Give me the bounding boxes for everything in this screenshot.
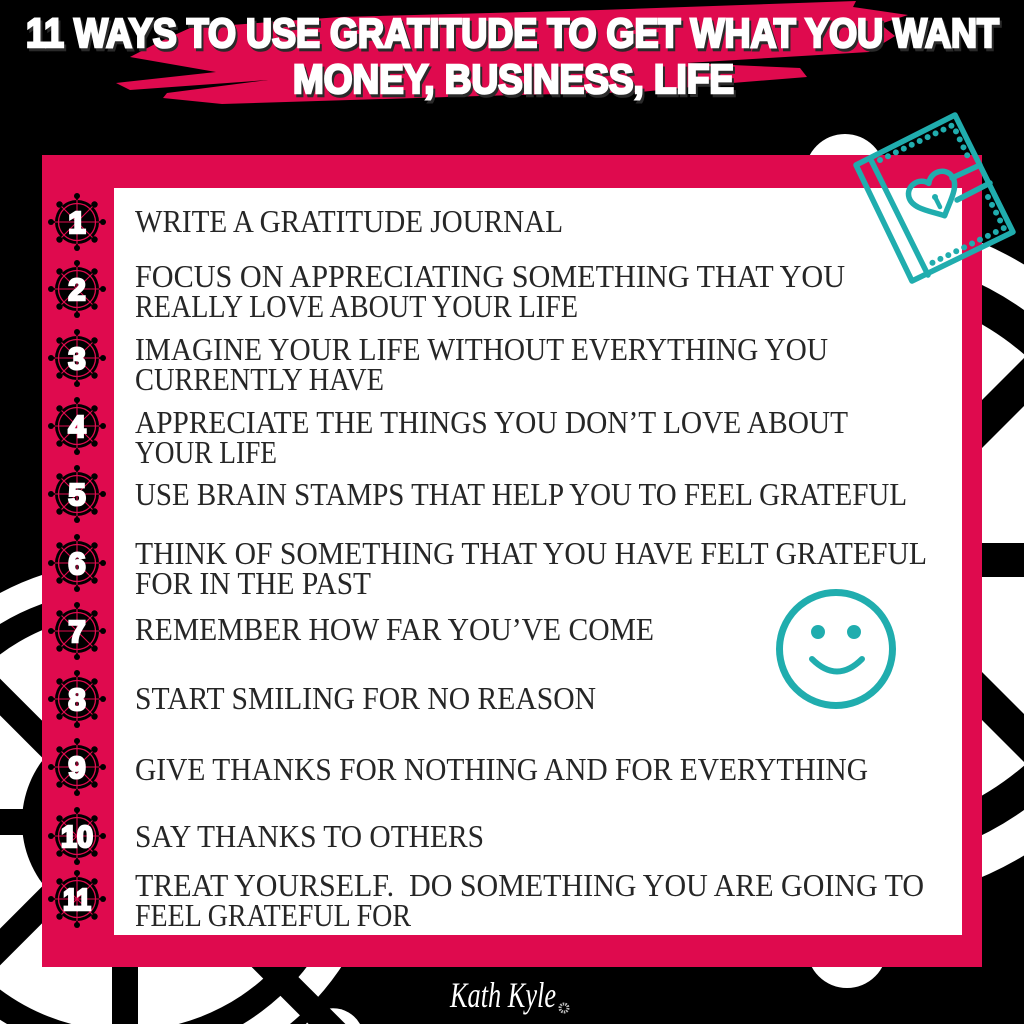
- item 3: CURRENTLY HAVE: [135, 361, 384, 397]
- item 9: 9: [68, 750, 86, 785]
- brush stroke behind title: [116, 1, 908, 104]
- item 10: [48, 807, 484, 865]
- item 2: REALLY LOVE ABOUT YOUR LIFE: [135, 288, 578, 324]
- item 4: APPRECIATE THE THINGS YOU DON’T LOVE ABOUT: [135, 404, 848, 440]
- background mandala: right: [805, 134, 1024, 988]
- item 3: [48, 329, 828, 397]
- panel: white list area: [114, 188, 962, 935]
- item 7: 7: [68, 614, 86, 649]
- item 1: 1: [68, 205, 86, 240]
- item 2: FOCUS ON APPRECIATING SOMETHING THAT YOU: [135, 258, 845, 294]
- item 11: TREAT YOURSELF. DO SOMETHING YOU ARE GOING TO: [135, 867, 924, 903]
- title: MONEY, BUSINESS, LIFE: [293, 56, 734, 102]
- item 4: YOUR LIFE: [135, 434, 277, 470]
- item 8: 8: [68, 682, 86, 717]
- item 6: [48, 534, 927, 601]
- item 11: FEEL GRATEFUL FOR: [135, 897, 412, 933]
- item 8: [48, 670, 596, 728]
- item 4: 4: [68, 409, 86, 444]
- item 10: 10: [61, 819, 93, 854]
- background mandala: left: [0, 562, 385, 1024]
- signature: Kath Kyle: [449, 975, 556, 1015]
- panel: red frame: [42, 155, 982, 967]
- item 8: START SMILING FOR NO REASON: [135, 680, 596, 716]
- item 5: USE BRAIN STAMPS THAT HELP YOU TO FEEL GRATEFUL: [135, 476, 907, 512]
- item 1: [48, 193, 563, 251]
- title: [26, 10, 999, 102]
- item 6: THINK OF SOMETHING THAT YOU HAVE FELT GRATEFUL: [135, 535, 927, 571]
- item 7: REMEMBER HOW FAR YOU’VE COME: [135, 611, 654, 647]
- item 3: IMAGINE YOUR LIFE WITHOUT EVERYTHING YOU: [135, 331, 828, 367]
- item 1: WRITE A GRATITUDE JOURNAL: [135, 203, 563, 239]
- item 10: SAY THANKS TO OTHERS: [135, 818, 484, 854]
- item 6: 6: [68, 546, 86, 581]
- item 5: [48, 465, 907, 523]
- item 11: 11: [63, 882, 91, 917]
- icon: locked diary with heart: [856, 115, 1013, 281]
- item 2: 2: [68, 272, 86, 307]
- icon: smiley face: [780, 592, 892, 706]
- item 2: [48, 258, 845, 324]
- item 5: 5: [68, 477, 86, 512]
- item 6: FOR IN THE PAST: [135, 565, 371, 601]
- item 9: [48, 738, 868, 796]
- item 4: [48, 397, 848, 470]
- item 11: [48, 867, 924, 933]
- item 9: GIVE THANKS FOR NOTHING AND FOR EVERYTHING: [135, 751, 868, 787]
- item 3: 3: [68, 341, 86, 376]
- item 7: [48, 602, 654, 660]
